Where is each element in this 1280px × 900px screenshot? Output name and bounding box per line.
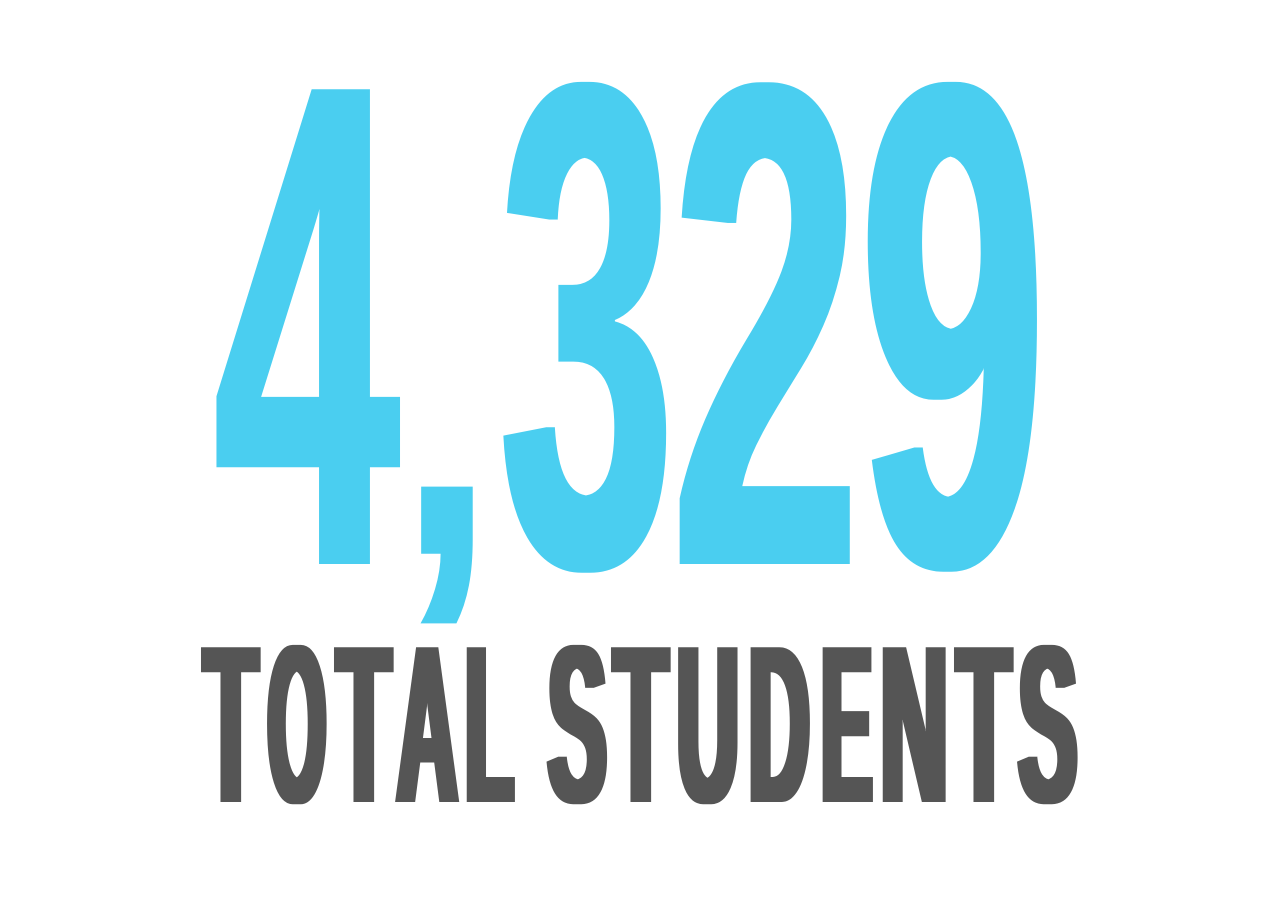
caption: TOTAL STUDENTS: U — [677, 600, 739, 851]
caption: TOTAL STUDENTS: D — [749, 598, 809, 850]
caption: TOTAL STUDENTS: T — [204, 599, 258, 851]
caption: TOTAL STUDENTS — [204, 598, 1077, 851]
caption: TOTAL STUDENTS: O — [268, 598, 326, 850]
caption: TOTAL STUDENTS: E — [822, 598, 872, 850]
caption: TOTAL STUDENTS: T — [337, 599, 391, 851]
caption: TOTAL STUDENTS: S — [1018, 599, 1077, 851]
caption: TOTAL STUDENTS: T — [614, 599, 668, 851]
caption: TOTAL STUDENTS: S — [548, 599, 607, 851]
big number: 4,329: , — [404, 147, 489, 649]
big number: 4,329 — [216, 0, 1045, 713]
caption: TOTAL STUDENTS: A — [397, 598, 457, 850]
caption: TOTAL STUDENTS: L — [466, 599, 513, 850]
caption: TOTAL STUDENTS: N — [880, 598, 948, 850]
caption: TOTAL STUDENTS: T — [957, 599, 1011, 851]
